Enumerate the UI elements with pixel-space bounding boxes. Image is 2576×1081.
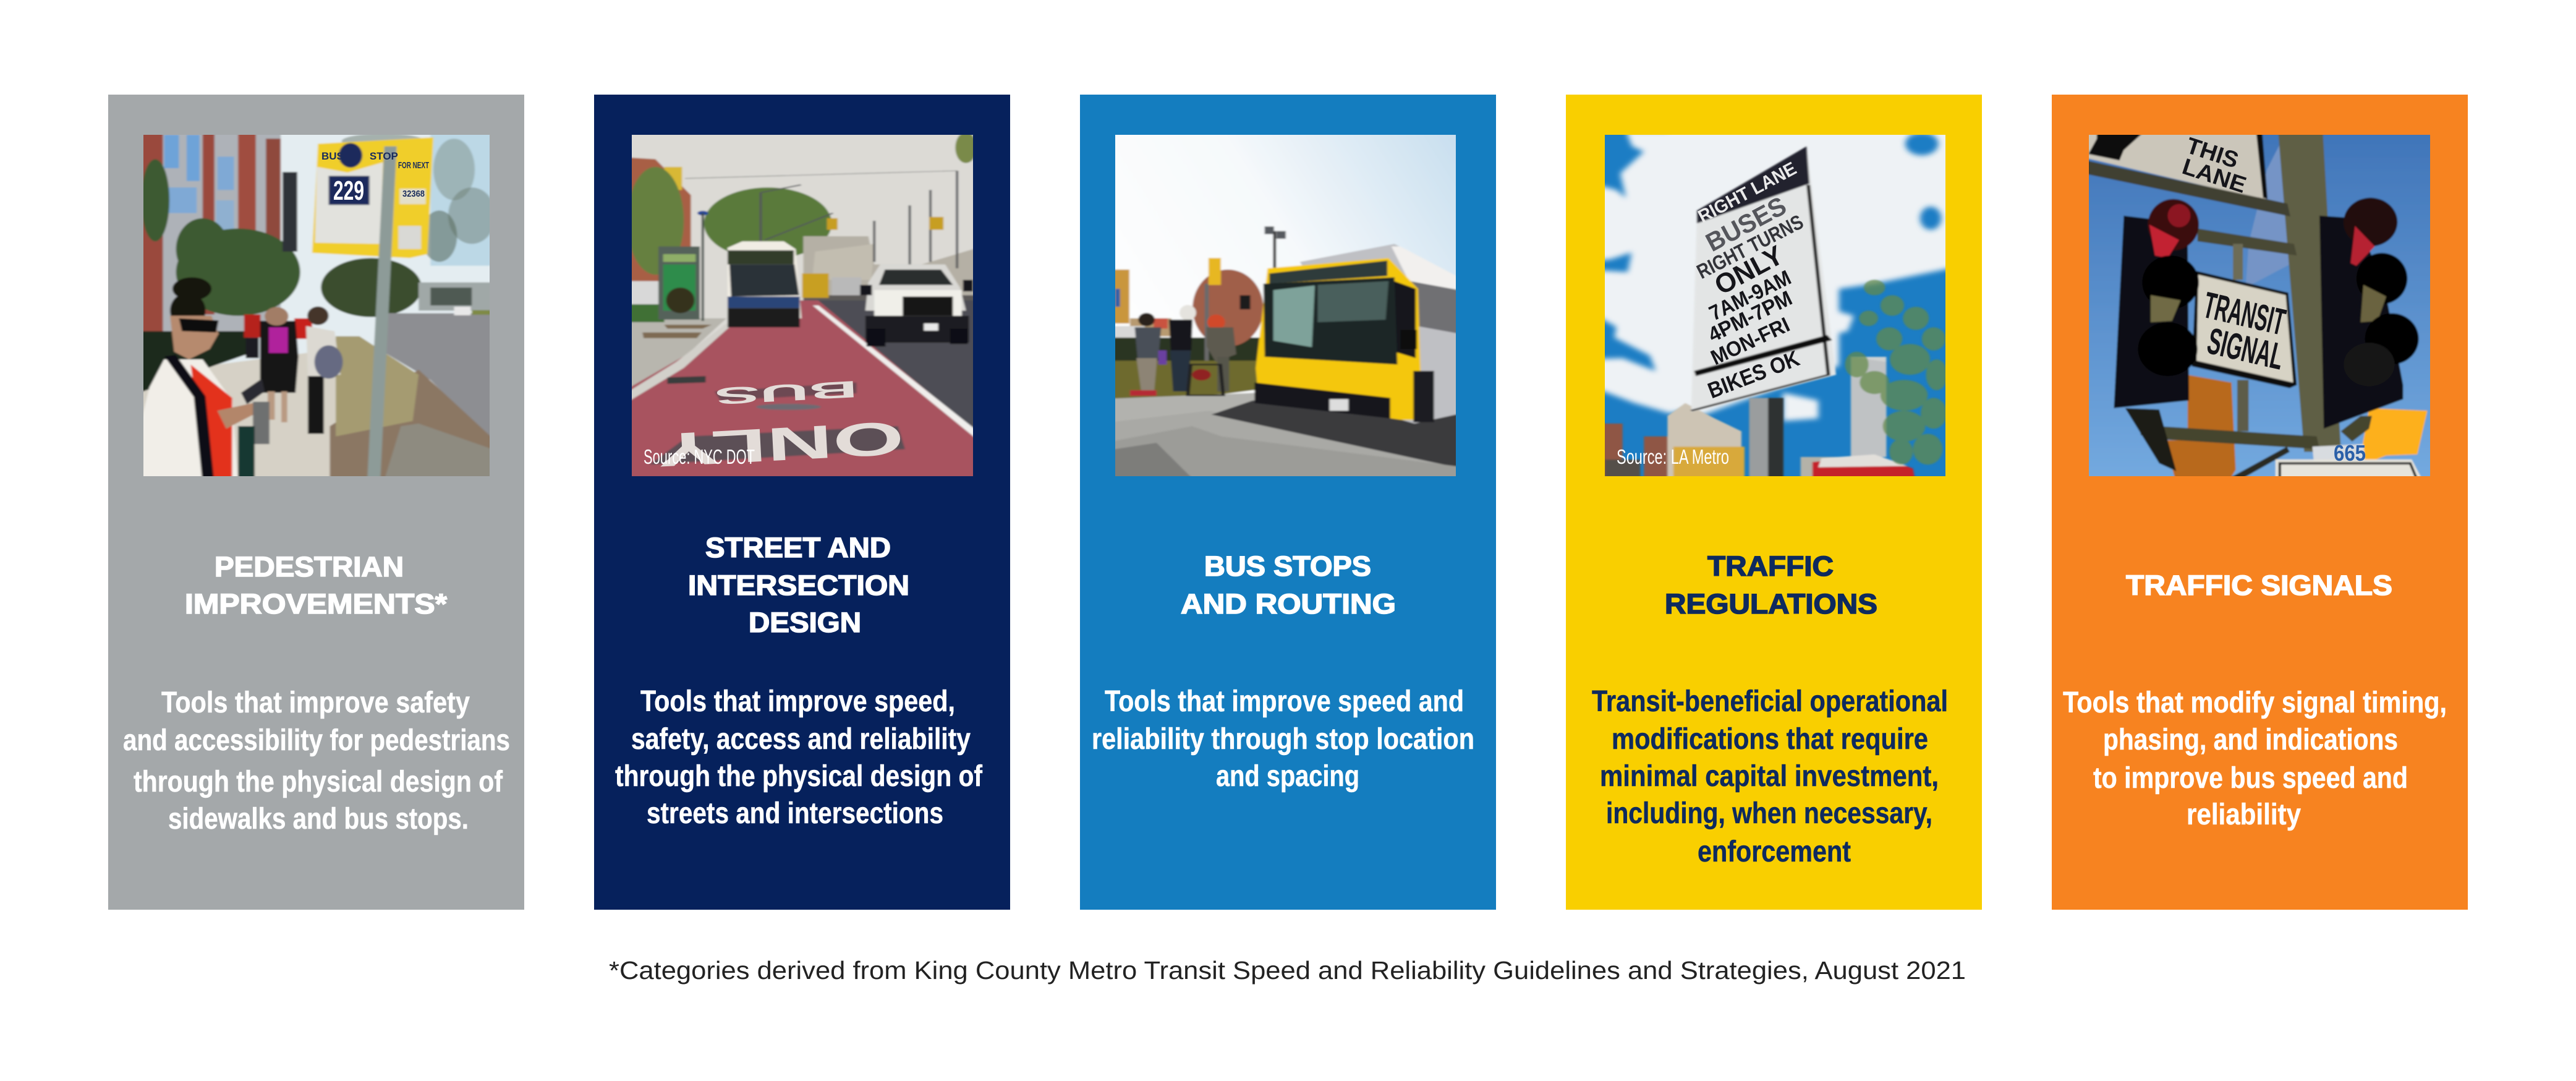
photo: right lane buses only sign against the sky xyxy=(1605,135,1945,476)
description text xyxy=(123,686,510,835)
heading: PEDESTRIAN xyxy=(215,551,404,583)
description text: streets and intersections xyxy=(647,797,943,830)
heading xyxy=(1665,550,1877,620)
heading: INTERSECTION xyxy=(688,570,909,601)
description text: Transit-beneficial operational xyxy=(1592,685,1948,718)
description text: Tools that modify signal timing, xyxy=(2063,686,2447,719)
sign text: this lane xyxy=(2179,132,2250,198)
description text xyxy=(1092,685,1474,793)
sign text: BUSES xyxy=(1701,191,1791,257)
heading: REGULATIONS xyxy=(1665,588,1877,620)
photo credit: Source: NYC DOT xyxy=(644,445,755,468)
description text: modifications that require xyxy=(1612,723,1928,756)
heading: AND ROUTING xyxy=(1181,588,1396,620)
description text: Tools that improve speed, xyxy=(640,685,955,718)
sign text: transit signal xyxy=(2200,284,2289,378)
description text: phasing, and indications xyxy=(2103,724,2398,756)
heading: IMPROVEMENTS* xyxy=(185,588,448,620)
panel: traffic regulations xyxy=(1566,95,1982,910)
sign text: this lane: LANE xyxy=(2179,153,2250,198)
description text: Tools that improve safety xyxy=(161,686,470,719)
road marking: only: ONLY xyxy=(657,411,905,476)
description text: including, when necessary, xyxy=(1606,797,1932,830)
description text: reliability xyxy=(2187,798,2301,831)
description text: enforcement xyxy=(1698,835,1851,868)
panel: bus stops and routing xyxy=(1080,95,1496,910)
sign text: RIGHT LANE xyxy=(1695,158,1800,227)
heading: BUS STOPS xyxy=(1204,550,1371,582)
road marking: bus: BUS xyxy=(714,375,859,409)
sign text: RIGHT TURNS xyxy=(1693,210,1807,283)
panel: street and intersection design xyxy=(594,95,1010,910)
sign text: 7AM-9AM xyxy=(1706,266,1795,325)
sign text: route number: 229 xyxy=(333,176,364,206)
sign text: MON-FRI xyxy=(1707,313,1793,370)
sign text: bus stop: BUS STOP xyxy=(321,150,398,162)
description text: and accessibility for pedestrians xyxy=(123,724,510,757)
heading: STREET AND xyxy=(705,532,891,563)
description text xyxy=(1592,685,1948,868)
description text: Tools that improve speed and xyxy=(1105,685,1464,718)
heading: DESIGN xyxy=(749,607,861,638)
photo: transit signal heads on a pole xyxy=(2089,135,2430,476)
description text: safety, access and reliability xyxy=(631,723,971,756)
description text: and spacing xyxy=(1216,760,1359,793)
sign text: 4PM-7PM xyxy=(1704,286,1796,347)
photo: woman and riders at a bus stop sign xyxy=(143,135,490,476)
description text: reliability through stop location xyxy=(1092,723,1474,756)
description text xyxy=(2063,686,2447,831)
sign text: ONLY xyxy=(1710,240,1788,301)
footnote: *Categories derived from King County Metro Transit Speed and Reliability Guidelines and Strategies, August 2021 xyxy=(609,956,1966,985)
heading: TRAFFIC SIGNALS xyxy=(2126,570,2392,601)
description text: through the physical design of xyxy=(134,766,503,798)
panel: pedestrian improvements xyxy=(108,95,524,910)
heading xyxy=(1181,550,1396,620)
sign text xyxy=(1693,158,1807,403)
heading: TRAFFIC xyxy=(1707,550,1834,582)
photo credit: Source: LA Metro xyxy=(1617,445,1729,468)
photo: yellow bus at a stop with riders xyxy=(1115,135,1456,476)
sign text: transit signal: TRANSIT xyxy=(2200,284,2289,343)
description text xyxy=(615,685,983,830)
photo: red bus lane with bus and truck xyxy=(632,135,973,476)
heading xyxy=(185,551,448,620)
description text: sidewalks and bus stops. xyxy=(168,803,469,835)
heading xyxy=(688,532,909,638)
panel: traffic signals xyxy=(2052,95,2468,910)
sign text: BIKES OK xyxy=(1704,345,1803,403)
sign text: this lane: THIS xyxy=(2183,132,2242,173)
description text: minimal capital investment, xyxy=(1600,760,1939,793)
description text: to improve bus speed and xyxy=(2093,762,2408,795)
sign text: transit signal: SIGNAL xyxy=(2204,320,2288,378)
sign text: for next bus: FOR NEXT xyxy=(398,160,429,171)
sign text: pole number: 665 xyxy=(2334,440,2366,466)
description text: through the physical design of xyxy=(615,760,983,793)
sign text: stop id: 32368 xyxy=(402,189,425,199)
